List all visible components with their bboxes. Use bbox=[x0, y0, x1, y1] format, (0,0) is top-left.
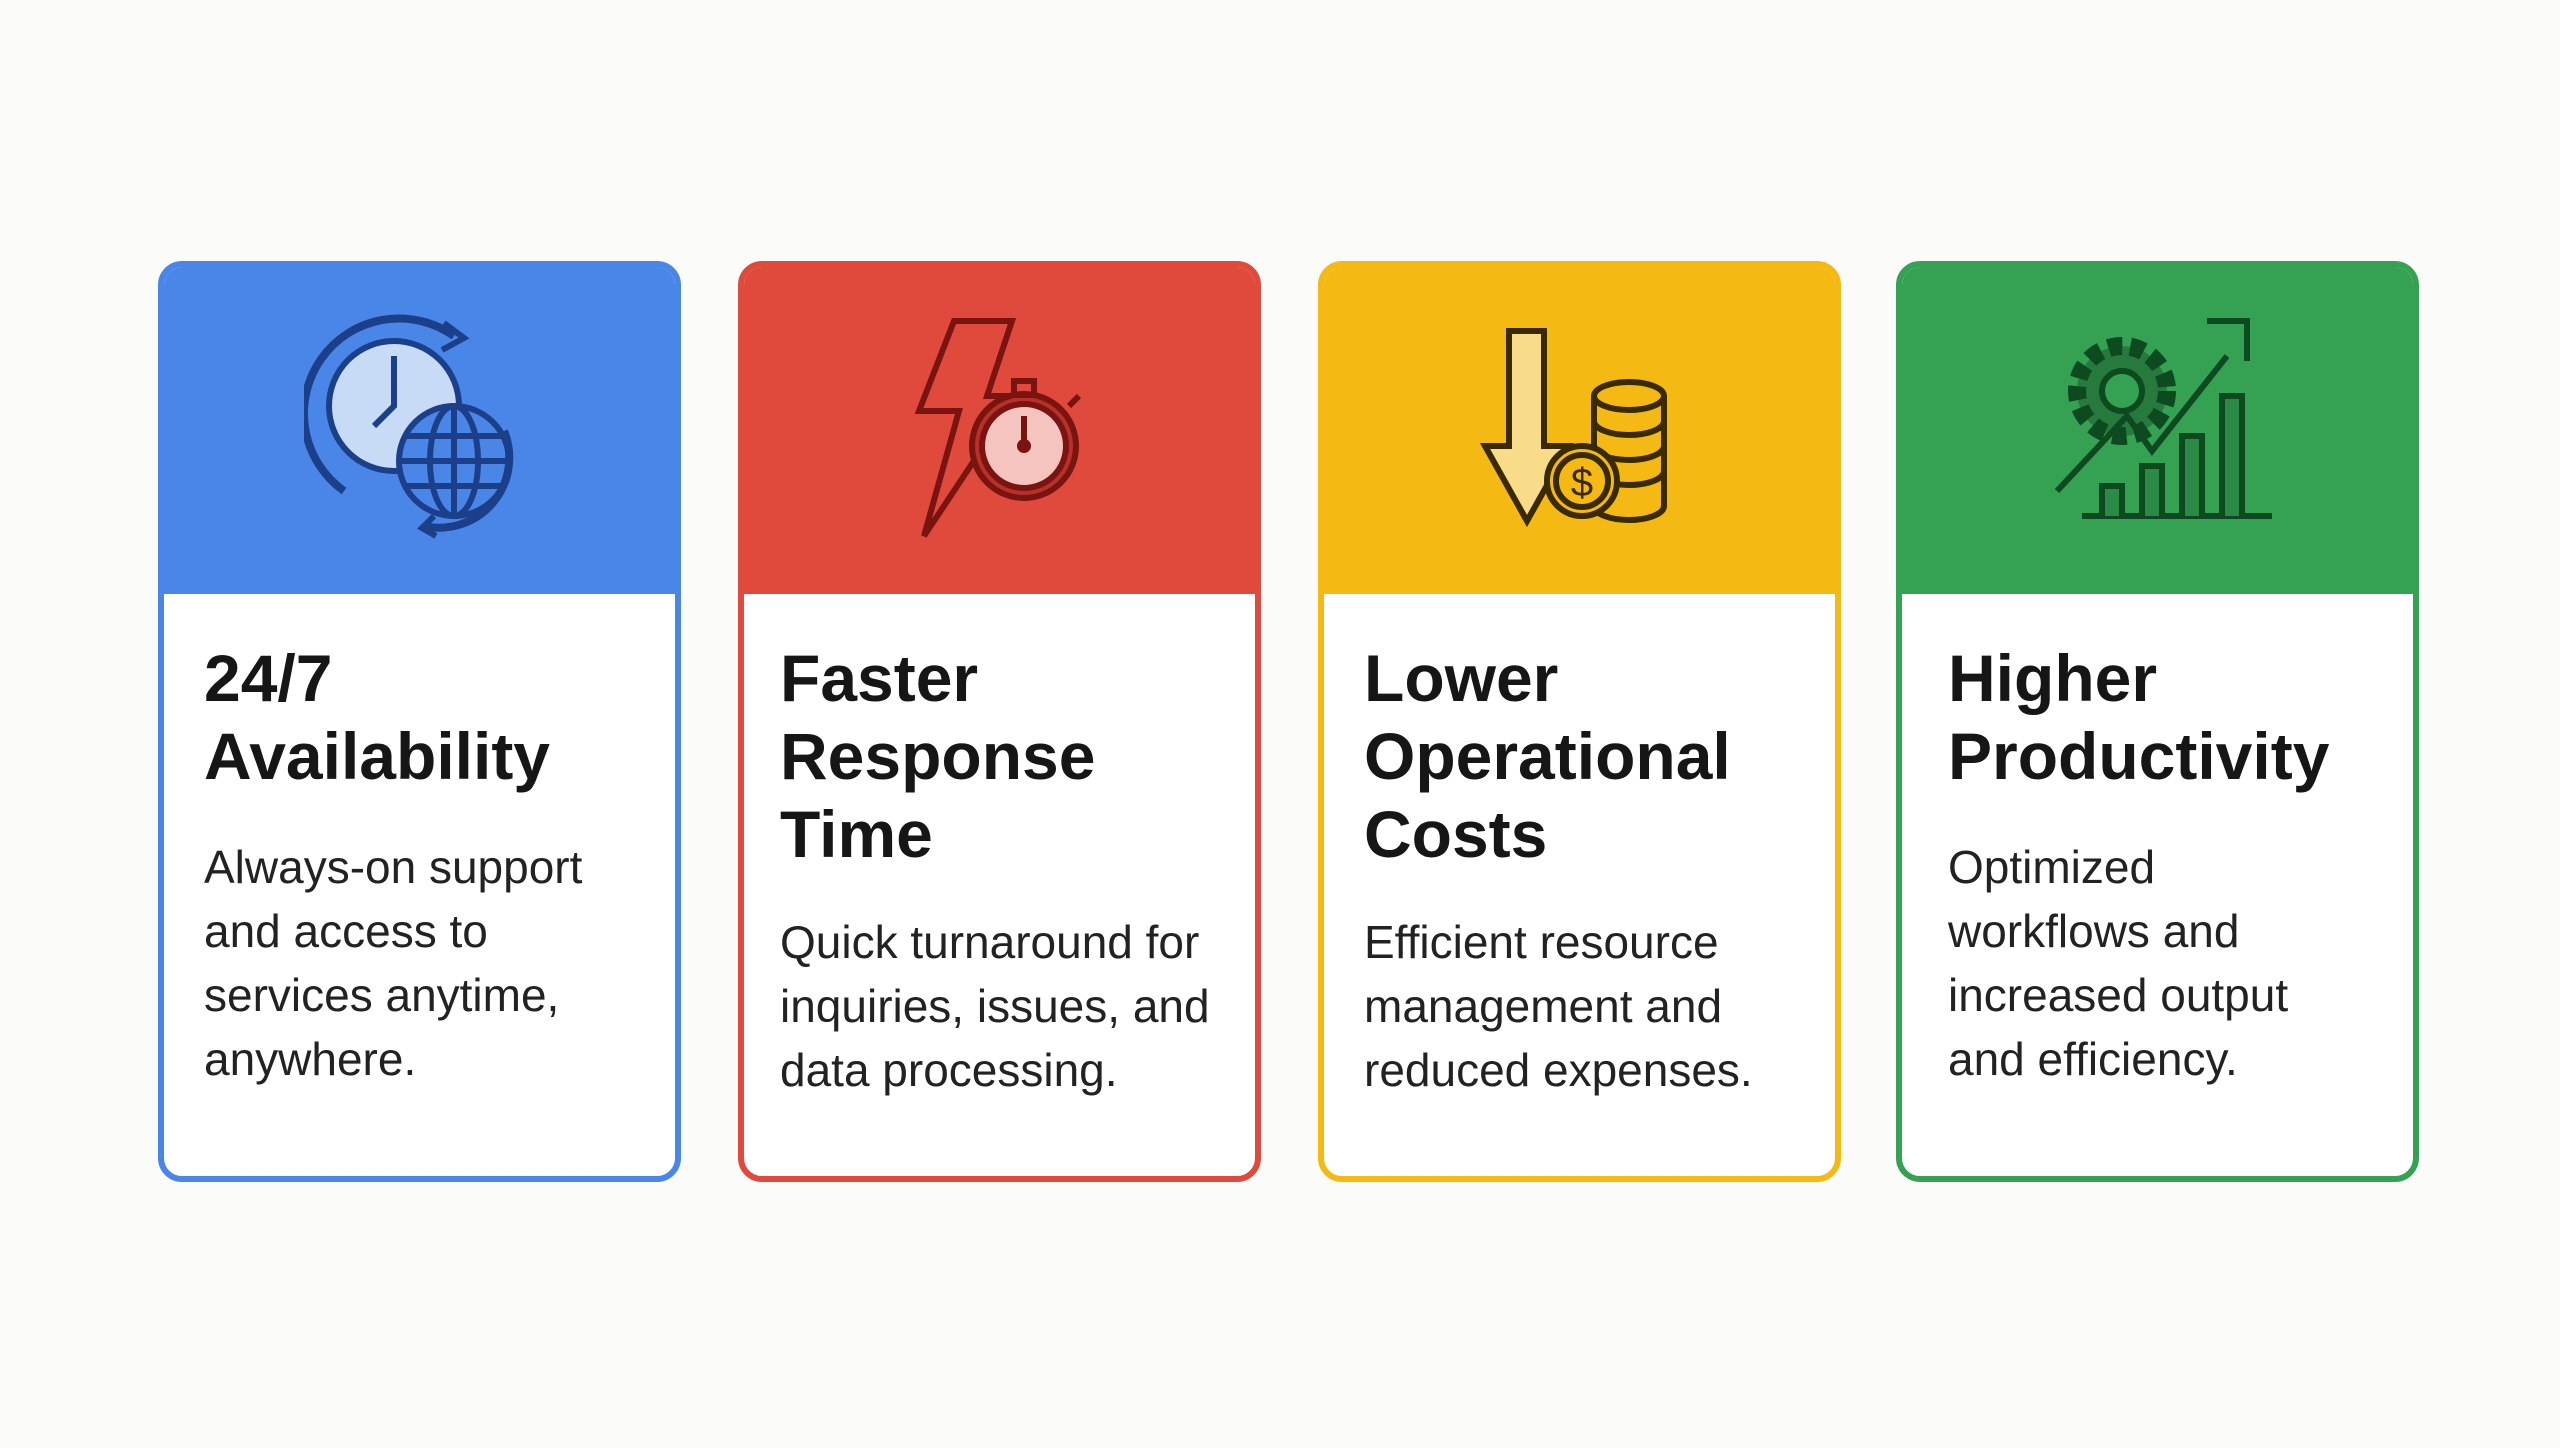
card: higher productivity bbox=[1896, 261, 2419, 1182]
icon: lightning and stopwatch bbox=[914, 318, 1081, 538]
body text: Optimized bbox=[1948, 841, 2155, 893]
title: Operational bbox=[1364, 719, 1731, 793]
icon: gear and growth chart bbox=[2055, 318, 2272, 519]
body text: management and bbox=[1364, 980, 1722, 1032]
title: Faster bbox=[780, 641, 978, 715]
title bbox=[1948, 641, 2330, 793]
body text: and efficiency. bbox=[1948, 1033, 2238, 1085]
body text bbox=[1948, 841, 2288, 1085]
title bbox=[1364, 641, 1731, 871]
title: Time bbox=[780, 797, 933, 871]
title: Availability bbox=[204, 719, 550, 793]
body text: Efficient resource bbox=[1364, 916, 1719, 968]
body text bbox=[780, 916, 1210, 1096]
title: Productivity bbox=[1948, 719, 2329, 793]
title: Response bbox=[780, 719, 1095, 793]
title bbox=[780, 641, 1095, 871]
body text: services anytime, bbox=[204, 969, 559, 1021]
title: Costs bbox=[1364, 797, 1547, 871]
body text: Quick turnaround for bbox=[780, 916, 1199, 968]
header: blue bbox=[158, 261, 681, 594]
card: lower operational costs bbox=[1318, 261, 1841, 1182]
header: red bbox=[738, 261, 1261, 594]
title: Higher bbox=[1948, 641, 2157, 715]
body text: data processing. bbox=[780, 1044, 1118, 1096]
body text bbox=[1364, 916, 1753, 1096]
body text: workflows and bbox=[1948, 905, 2239, 957]
body text: inquiries, issues, and bbox=[780, 980, 1210, 1032]
icon: arrow down and coins: $ bbox=[1571, 461, 1593, 505]
header: green bbox=[1896, 261, 2419, 594]
card: 24/7 availability bbox=[158, 261, 681, 1182]
card: faster response time bbox=[738, 261, 1261, 1182]
body text: and access to bbox=[204, 905, 488, 957]
title: Lower bbox=[1364, 641, 1558, 715]
header: yellow bbox=[1318, 261, 1841, 594]
body text: reduced expenses. bbox=[1364, 1044, 1753, 1096]
title bbox=[204, 641, 550, 793]
body text bbox=[204, 841, 582, 1085]
title: 24/7 bbox=[204, 641, 332, 715]
body text: Always-on support bbox=[204, 841, 582, 893]
body text: anywhere. bbox=[204, 1033, 416, 1085]
icon: clock and globe bbox=[304, 314, 514, 538]
body text: increased output bbox=[1948, 969, 2288, 1021]
icon: arrow down and coins bbox=[1480, 328, 1667, 527]
